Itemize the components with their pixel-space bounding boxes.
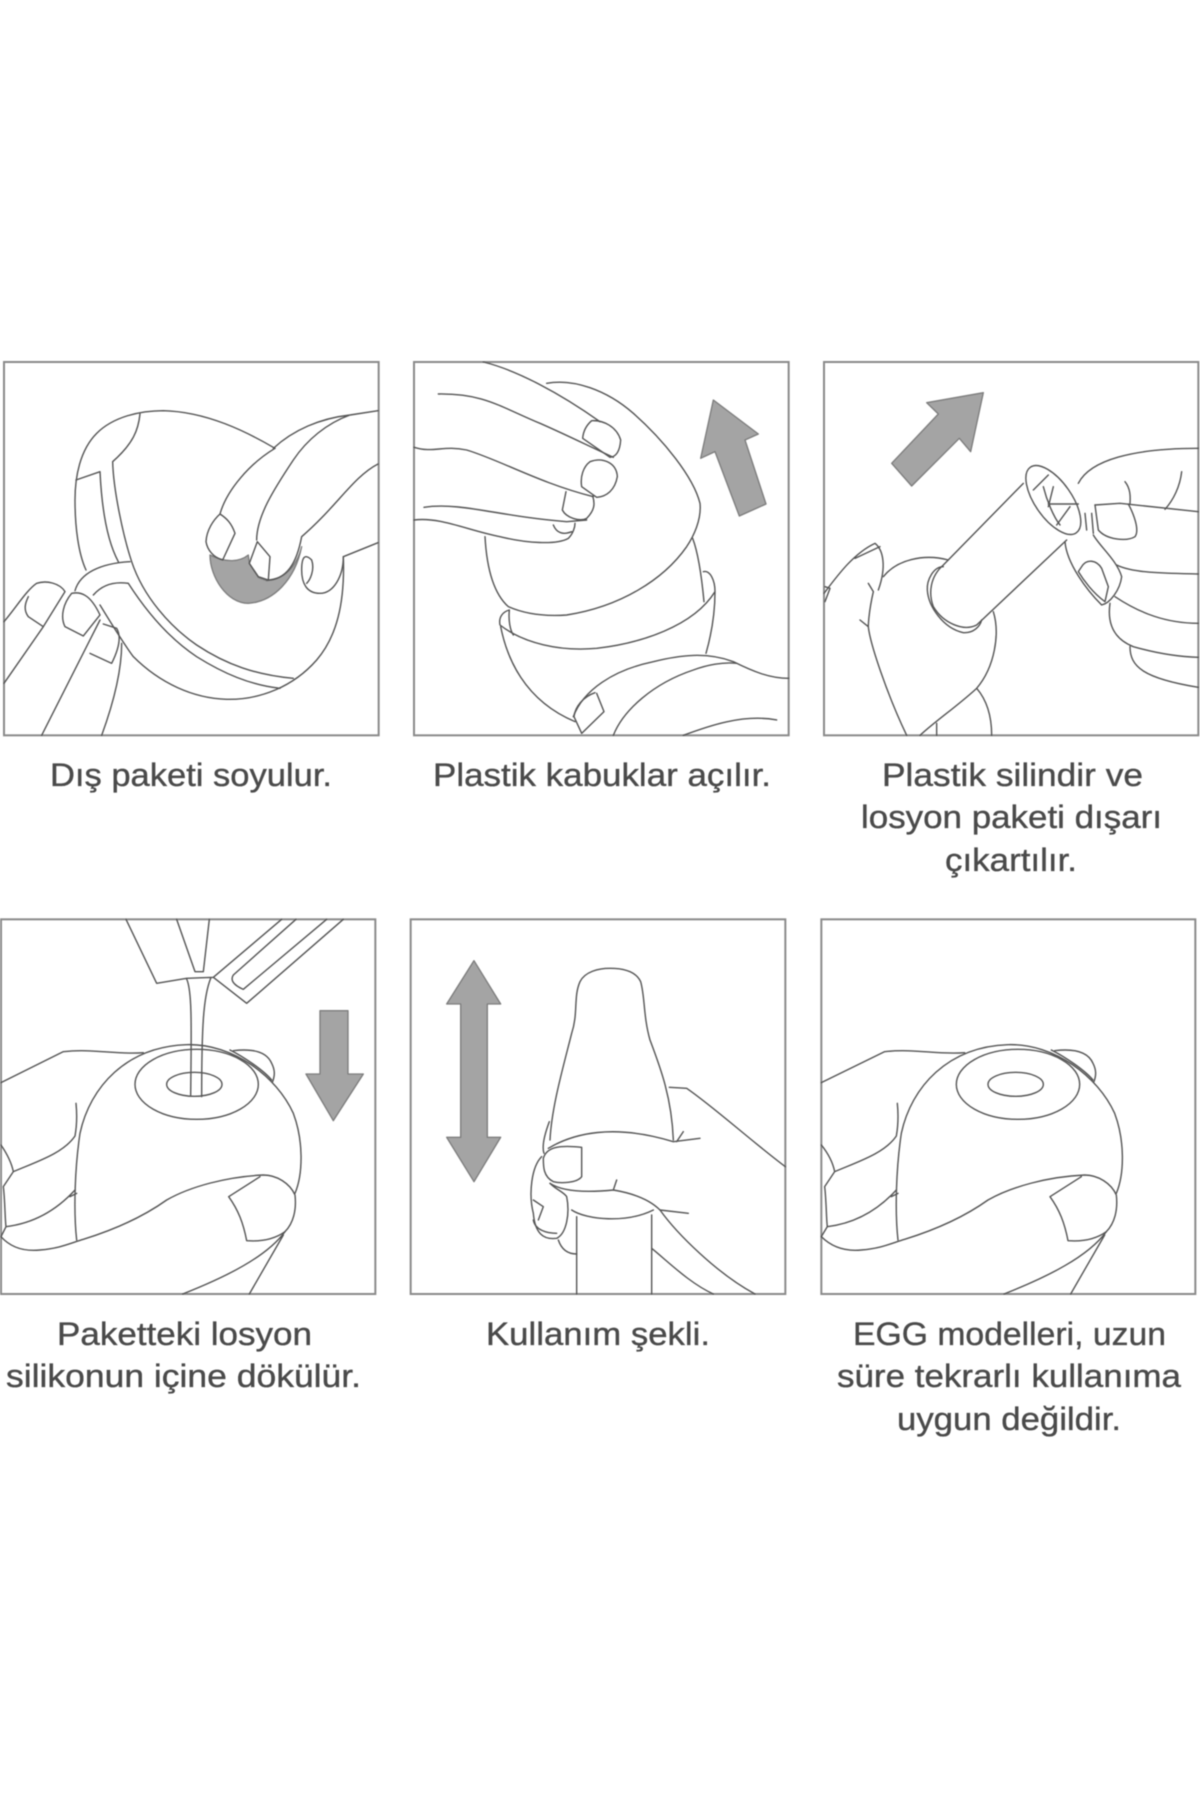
caption: EGG modelleri, uzun [853,1316,1166,1352]
panel: step 4 pour lotion into silicone [1,919,375,1394]
illustration: hands opening shells [414,362,789,735]
caption: silikonun içine dökülür. [6,1358,361,1394]
caption: Plastik silindir ve [882,757,1143,793]
illustration: hand holding egg [821,919,1195,1294]
illustration: hands removing cylinder [824,362,1198,735]
caption: süre tekrarlı kullanıma [837,1358,1181,1394]
panel: step 3 remove cylinder and lotion pack [824,362,1198,878]
icon: grey exposed area [210,547,302,603]
panel: step 5 how to use [411,919,785,1352]
caption: Kullanım şekli. [486,1316,710,1352]
illustration: hand holding device [411,919,785,1294]
illustration: hands peeling package [4,362,379,735]
illustration: pouring lotion into egg [1,919,375,1294]
caption: Plastik kabuklar açılır. [433,757,771,793]
caption: uygun değildir. [897,1401,1121,1437]
caption: çıkartılır. [945,842,1077,878]
icon: lotion packet and stream [126,919,343,1097]
panel: step 1 peel outer package [4,362,379,793]
caption: Paketteki losyon [57,1316,312,1352]
arrow: up-right [892,393,983,486]
panel: step 6 not for long-term reuse [821,919,1195,1437]
caption: losyon paketi dışarı [861,799,1162,835]
arrow: up-left [701,400,766,516]
caption [837,1316,1181,1437]
arrow: down [306,1011,363,1121]
arrow: double vertical [447,961,501,1182]
caption: Dış paketi soyulur. [50,757,332,793]
caption [6,1316,361,1394]
caption [861,757,1162,878]
panel: step 2 open plastic shells [414,362,789,793]
